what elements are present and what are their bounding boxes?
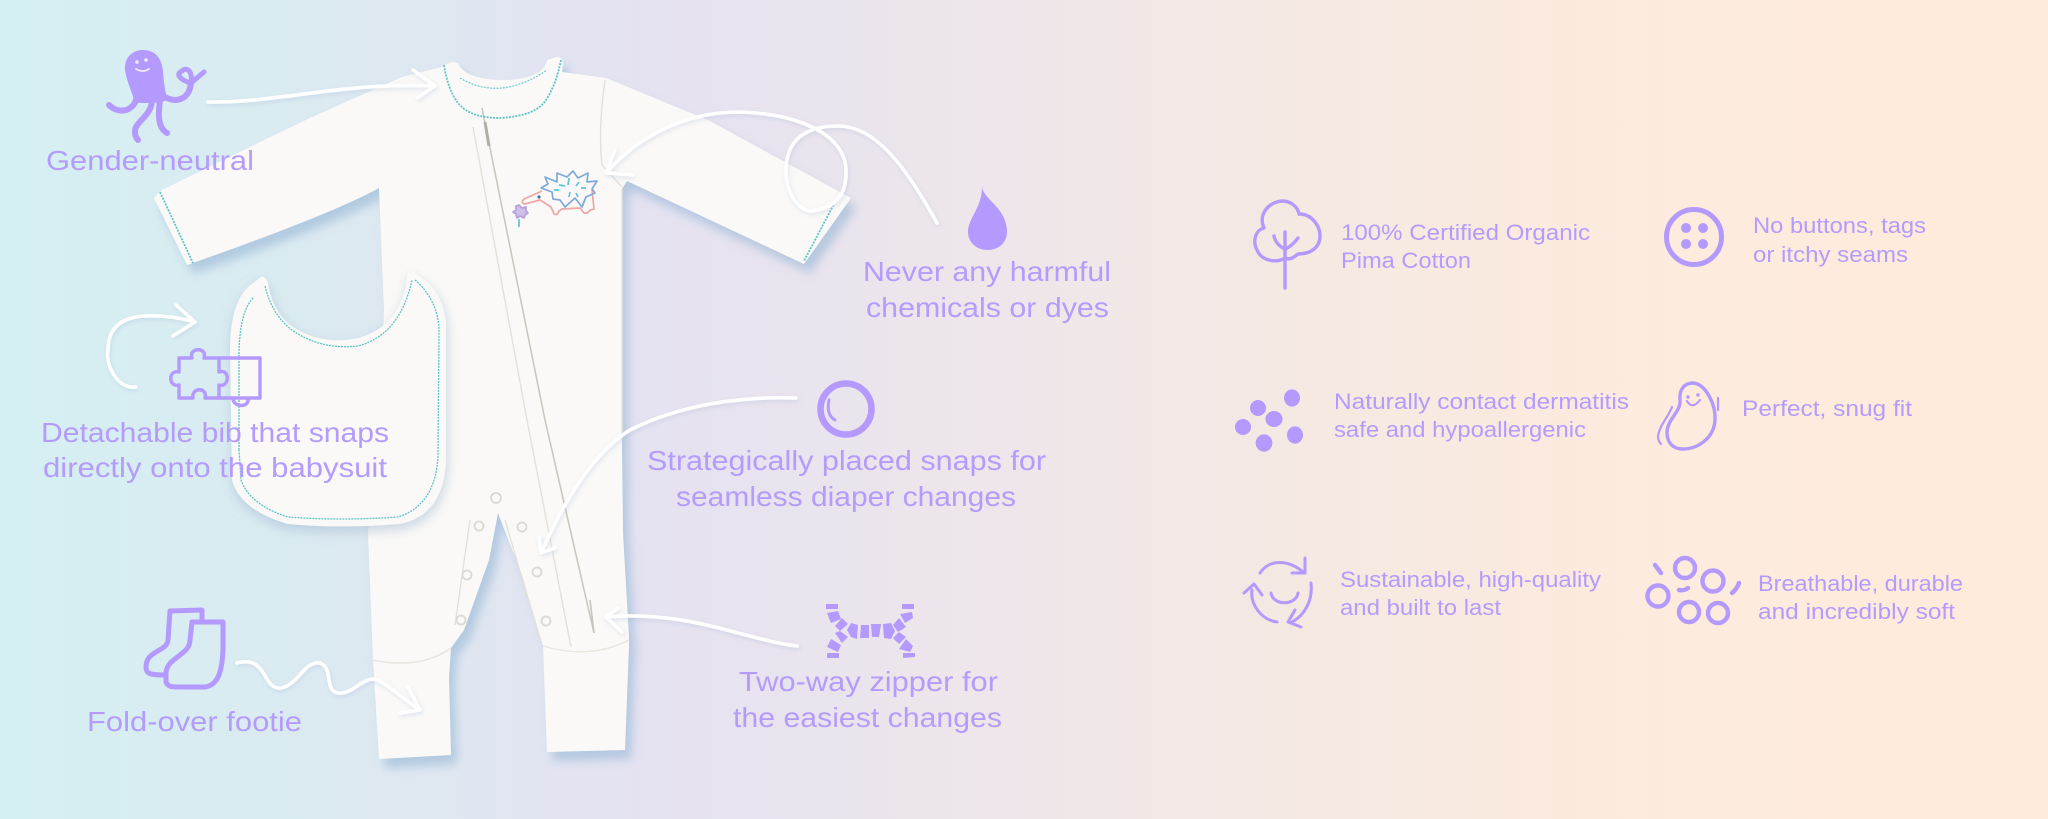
icon: recycle bbox=[1244, 558, 1311, 627]
arrow: gender-neutral bbox=[208, 70, 435, 102]
icon: bean bbox=[1658, 383, 1718, 449]
label: detachable bib: directly onto the babysuit bbox=[43, 452, 387, 483]
arrow: snaps bbox=[539, 398, 796, 553]
label: organic cotton: Pima Cotton bbox=[1341, 248, 1471, 273]
icon: circles bbox=[1648, 558, 1739, 623]
label: detachable bib: Detachable bib that snaps bbox=[41, 417, 389, 448]
arrow: footie bbox=[237, 662, 420, 713]
label: organic cotton: 100% Certified Organic bbox=[1341, 220, 1590, 245]
label: dermatitis safe: Naturally contact dermatitis bbox=[1334, 389, 1629, 414]
arrow: bib bbox=[108, 305, 195, 387]
icon: snap bbox=[820, 384, 872, 434]
label: no buttons: or itchy seams bbox=[1753, 242, 1908, 267]
label: snaps: Strategically placed snaps for bbox=[647, 445, 1046, 476]
label: zipper: Two-way zipper for bbox=[739, 666, 998, 697]
label: sustainable: Sustainable, high-quality bbox=[1340, 567, 1602, 592]
icon: puzzle bbox=[171, 350, 260, 406]
label: organic cotton bbox=[1341, 220, 1590, 273]
icon: dots bbox=[1235, 389, 1303, 452]
label: gender-neutral: Gender-neutral bbox=[46, 145, 254, 176]
label: snaps: seamless diaper changes bbox=[676, 481, 1016, 512]
hedgehog embroidery bbox=[513, 171, 597, 227]
label: breathable: and incredibly soft bbox=[1758, 599, 1956, 624]
label: snug fit: Perfect, snug fit bbox=[1742, 396, 1913, 421]
arrow: chemicals and dyes bbox=[606, 112, 937, 223]
icon: water drop bbox=[968, 187, 1007, 250]
label: zipper bbox=[733, 666, 1002, 733]
label: zipper: the easiest changes bbox=[733, 702, 1002, 733]
icon: octopus bbox=[109, 50, 204, 140]
icon: socks bbox=[146, 610, 223, 687]
label: chemicals: Never any harmful bbox=[863, 256, 1111, 287]
icon: zipper bbox=[826, 604, 915, 658]
label: chemicals: chemicals or dyes bbox=[866, 292, 1109, 323]
label: no buttons bbox=[1753, 213, 1926, 267]
label: detachable bib bbox=[41, 417, 389, 483]
detachable bib bbox=[230, 271, 446, 526]
label: sustainable: and built to last bbox=[1340, 595, 1502, 620]
babysuit bbox=[154, 57, 851, 759]
arrow: zipper bbox=[606, 608, 797, 646]
label: snaps bbox=[647, 445, 1046, 512]
label: breathable: Breathable, durable bbox=[1758, 571, 1963, 596]
label: sustainable bbox=[1340, 567, 1602, 620]
icon: button bbox=[1666, 210, 1722, 264]
label: dermatitis safe: safe and hypoallergenic bbox=[1334, 417, 1586, 442]
label: dermatitis safe bbox=[1334, 389, 1629, 442]
icon: tree bbox=[1255, 201, 1320, 288]
label: no buttons: No buttons, tags bbox=[1753, 213, 1926, 238]
label: fold-over footie: Fold-over footie bbox=[87, 706, 302, 737]
label: breathable bbox=[1758, 571, 1963, 624]
label: chemicals bbox=[863, 256, 1111, 323]
